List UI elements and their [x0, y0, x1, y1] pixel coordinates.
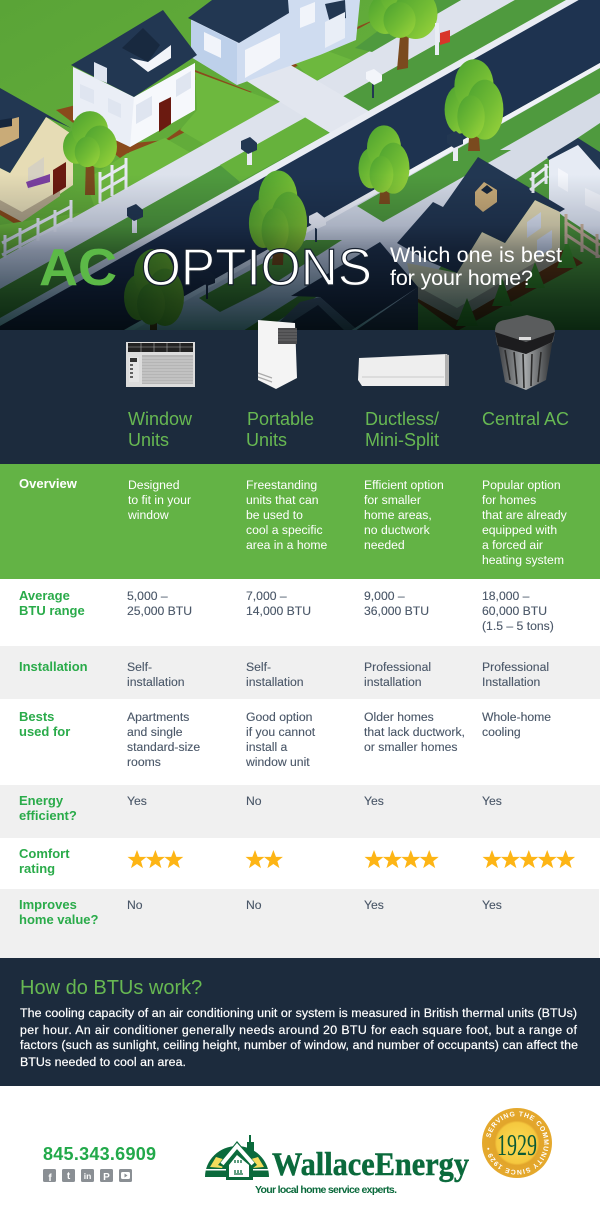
row: bests used for: or smaller homes	[364, 740, 457, 754]
row: average BTU range: 60,000 BTU	[482, 604, 547, 618]
lower grass strip	[357, 68, 600, 222]
row: bests used for: and single	[127, 725, 183, 739]
row: overview: Efficient option	[364, 478, 444, 492]
stars: window units	[128, 850, 183, 868]
row: installation: Professional	[364, 660, 431, 674]
row: installation: installation	[246, 675, 304, 689]
row: comfort rating: Comfort	[19, 846, 70, 861]
tree: top	[368, 0, 438, 39]
row: installation: Installation	[482, 675, 540, 689]
social icons: in	[84, 1171, 91, 1181]
logo sun	[205, 1146, 269, 1177]
BTU paragraph	[20, 1006, 578, 1069]
BTU paragraph: The cooling capacity of an air conditioning unit or system is measured in British thermal units (BTUs)	[20, 1006, 577, 1020]
BTU paragraph: factors (such as sunlight, ceiling height, number of window, and number of occupants) can affect the	[20, 1038, 578, 1052]
row: average BTU range: 25,000 BTU	[127, 604, 192, 618]
row: comfort rating	[0, 838, 600, 889]
row: improves home value: Yes	[364, 898, 384, 912]
heading: ductless	[365, 409, 439, 450]
row: overview: for homes	[482, 493, 536, 507]
phone number: 845.343.6909	[43, 1144, 156, 1164]
social icons	[43, 1169, 132, 1184]
row: bests used for: rooms	[127, 755, 161, 769]
row: bests used for: Older homes	[364, 710, 434, 724]
heading: ductless: Mini-Split	[365, 430, 439, 450]
row: installation: installation	[127, 675, 185, 689]
row: average BTU range: 9,000 –	[364, 589, 405, 603]
row: average BTU range: BTU range	[19, 603, 85, 618]
icon: ductless unit	[358, 354, 449, 386]
BTU paragraph: per hour. An air conditioner generally needs around 20 BTU for each square foot, but a range of	[20, 1023, 578, 1037]
row: overview: a forced air	[482, 538, 543, 552]
house: dark foreground house	[270, 242, 418, 331]
row: bests used for	[0, 699, 600, 785]
row: average BTU range: (1.5 – 5 tons)	[482, 619, 554, 633]
row: overview: equipped with	[482, 523, 557, 537]
row: improves home value: No	[246, 898, 262, 912]
heading: window units: Units	[128, 430, 169, 450]
social icons: f	[48, 1173, 52, 1184]
row: bests used for: standard-size	[127, 740, 200, 754]
row: average BTU range: 7,000 –	[246, 589, 287, 603]
row: comfort rating: rating	[19, 861, 55, 876]
row: energy efficient: Yes	[127, 794, 147, 808]
row: installation: installation	[364, 675, 422, 689]
heading: window units: Window	[128, 409, 193, 429]
row: improves home value: home value?	[19, 912, 99, 927]
row: overview: be used to	[246, 508, 303, 522]
icon: central AC	[495, 315, 555, 390]
row: overview: Popular option	[482, 478, 561, 492]
title: OPTIONS	[141, 239, 372, 297]
row: overview: needed	[364, 538, 405, 552]
row: average BTU range	[0, 579, 600, 646]
heading: portable units	[246, 409, 314, 450]
tree: front	[124, 249, 184, 326]
row: bests used for: Apartments	[127, 710, 189, 724]
heading: portable units: Portable	[247, 409, 314, 429]
lower side pavement	[0, 63, 600, 400]
icon: portable unit	[258, 320, 297, 389]
street	[0, 0, 589, 326]
row: bests used for: if you cannot	[246, 725, 316, 739]
white fences	[2, 158, 126, 258]
driveway	[245, 60, 372, 136]
row: installation: Self-	[246, 660, 271, 674]
title: AC	[39, 239, 117, 297]
title	[39, 239, 372, 297]
heading: portable units: Units	[246, 430, 287, 450]
row: overview: no ductwork	[364, 523, 431, 537]
row: overview	[0, 464, 600, 579]
stars: central AC	[482, 850, 575, 868]
heading: window units	[128, 409, 193, 450]
mailboxes	[127, 69, 463, 299]
row: bests used for: used for	[19, 724, 70, 739]
row: improves home value: No	[127, 898, 143, 912]
subtitle	[390, 243, 562, 290]
upper sidewalk	[0, 0, 515, 289]
BTU paragraph: BTUs needed to cool an area.	[20, 1055, 186, 1069]
logo: Wallace Energy	[205, 1135, 469, 1196]
subtitle: Which one is best	[390, 243, 562, 267]
heading: ductless: Ductless/	[365, 409, 439, 429]
icon: window unit	[126, 342, 195, 387]
row: energy efficient: Yes	[364, 794, 384, 808]
logo: Wallace Energy: WallaceEnergy	[272, 1147, 469, 1183]
row: improves home value: Yes	[482, 898, 502, 912]
row: energy efficient: Yes	[482, 794, 502, 808]
row: improves home value: Improves	[19, 897, 77, 912]
row: installation: Self-	[127, 660, 152, 674]
row: installation	[0, 646, 600, 699]
house: tan house lower right	[397, 157, 583, 331]
row: energy efficient: efficient?	[19, 808, 77, 823]
seal: serving since 1929: SERVING THE COMMUNITY SINCE 1929 •	[486, 1111, 549, 1175]
row: overview: home areas,	[364, 508, 432, 522]
dark grass top right	[355, 0, 461, 52]
row: average BTU range: Average	[19, 588, 70, 603]
lawn patches	[180, 72, 279, 147]
logo: Wallace Energy: Your local home service experts.	[255, 1184, 397, 1196]
stars: ductless	[364, 850, 439, 868]
panel: column headers	[0, 315, 600, 464]
hero neighborhood illustration	[0, 0, 600, 400]
row: energy efficient: Energy	[19, 793, 64, 808]
row: overview: units that can	[246, 493, 318, 507]
row: overview: window	[127, 508, 169, 522]
tree: lower	[249, 170, 307, 254]
stars: portable units	[246, 850, 283, 868]
tree: left	[63, 111, 117, 168]
upper grass strip	[0, 0, 566, 318]
row: improves home value	[0, 889, 599, 958]
darkening overlay	[0, 175, 600, 331]
row: overview: cool a specific	[246, 523, 323, 537]
social icons: t	[67, 1171, 71, 1182]
shrubs	[456, 240, 577, 326]
house: right white	[547, 138, 600, 240]
tree: middle	[358, 125, 410, 194]
row: overview: area in a home	[246, 538, 328, 552]
right fences	[530, 164, 600, 258]
heading: central AC: Central AC	[482, 409, 569, 429]
row: bests used for: that lack ductwork,	[364, 725, 465, 739]
for sale sign	[435, 23, 450, 55]
trunks	[85, 25, 480, 331]
row: overview: for smaller	[364, 493, 421, 507]
seal: serving since 1929: 1929	[497, 1127, 537, 1162]
row: energy efficient	[0, 785, 600, 838]
row: bests used for: cooling	[482, 725, 521, 739]
row: overview: Overview	[19, 476, 78, 491]
row: installation: Professional	[482, 660, 549, 674]
row: bests used for: Bests	[19, 709, 54, 724]
row: overview: Freestanding	[246, 478, 317, 492]
row: average BTU range: 36,000 BTU	[364, 604, 429, 618]
row: overview: to fit in your	[128, 493, 191, 507]
row: overview: that are already	[482, 508, 568, 522]
logo house	[218, 1135, 257, 1180]
row: installation: Installation	[19, 659, 88, 674]
tree: right	[445, 59, 503, 140]
row: bests used for: Whole-home	[482, 710, 551, 724]
row: average BTU range: 14,000 BTU	[246, 604, 311, 618]
lower lot grass	[199, 240, 342, 312]
house: tan cottage left	[0, 88, 73, 222]
panel: how do BTUs work	[0, 958, 600, 1086]
row: bests used for: install a	[246, 740, 288, 754]
mulch beds	[190, 70, 252, 95]
house: blue garage house	[188, 0, 360, 85]
house: white two-storey	[71, 10, 197, 147]
footer background	[0, 1086, 600, 1224]
row: bests used for: window unit	[245, 755, 310, 769]
row: average BTU range: 5,000 –	[127, 589, 168, 603]
row: overview: Designed	[128, 478, 180, 492]
heading: BTUs: How do BTUs work?	[20, 977, 202, 999]
row: energy efficient: No	[246, 794, 262, 808]
row: overview: heating system	[482, 553, 564, 567]
social icons: P	[103, 1172, 110, 1183]
row: bests used for: Good option	[246, 710, 312, 724]
subtitle: for your home?	[390, 266, 533, 290]
row: average BTU range: 18,000 –	[482, 589, 530, 603]
